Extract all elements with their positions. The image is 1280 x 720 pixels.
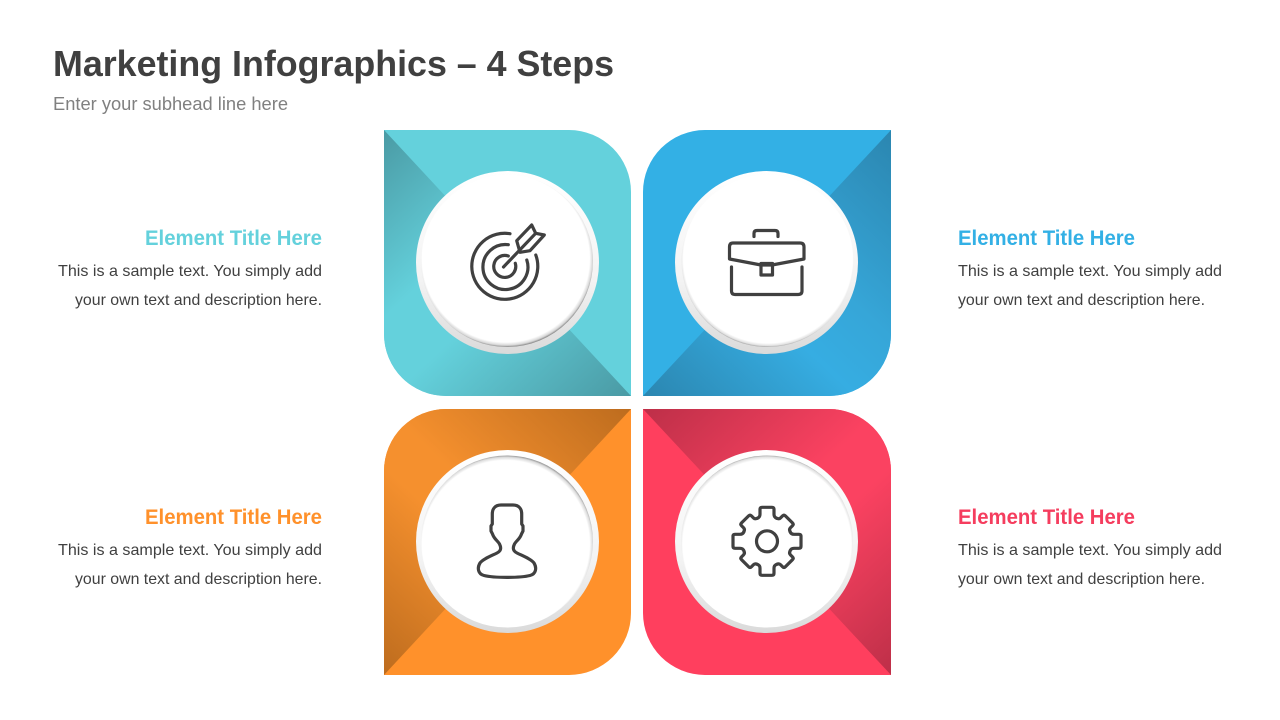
text block: orange element: Element Title Here: [145, 506, 322, 529]
icon: gear: [733, 507, 801, 575]
panel: blue step: [643, 130, 891, 396]
subhead: Enter your subhead line here: [53, 93, 288, 114]
text block: red element: your own text and description here.: [958, 571, 1205, 588]
icon: briefcase: [730, 230, 804, 294]
icon: target with arrow: [472, 225, 544, 299]
title: Marketing Infographics – 4 Steps: [53, 43, 614, 84]
text block: orange element: This is a sample text. You simply add: [58, 542, 322, 559]
text block: blue element: Element Title Here: [958, 227, 1135, 250]
panel: teal step: [384, 130, 631, 396]
text block: blue element: This is a sample text. You simply add: [958, 263, 1222, 280]
text block: red element: Element Title Here: [958, 506, 1135, 529]
text block: orange element: [58, 506, 322, 588]
text block: blue element: [958, 227, 1222, 309]
text block: red element: [958, 506, 1222, 588]
panel: red step: [643, 409, 891, 675]
text block: teal element: your own text and description here.: [75, 292, 322, 309]
text block: red element: This is a sample text. You simply add: [958, 542, 1222, 559]
text block: teal element: Element Title Here: [145, 227, 322, 250]
panel: orange step: [384, 409, 631, 675]
text block: teal element: This is a sample text. You simply add: [58, 263, 322, 280]
text block: teal element: [58, 227, 322, 309]
icon: person bust: [478, 505, 536, 577]
text block: blue element: your own text and description here.: [958, 292, 1205, 309]
text block: orange element: your own text and description here.: [75, 571, 322, 588]
